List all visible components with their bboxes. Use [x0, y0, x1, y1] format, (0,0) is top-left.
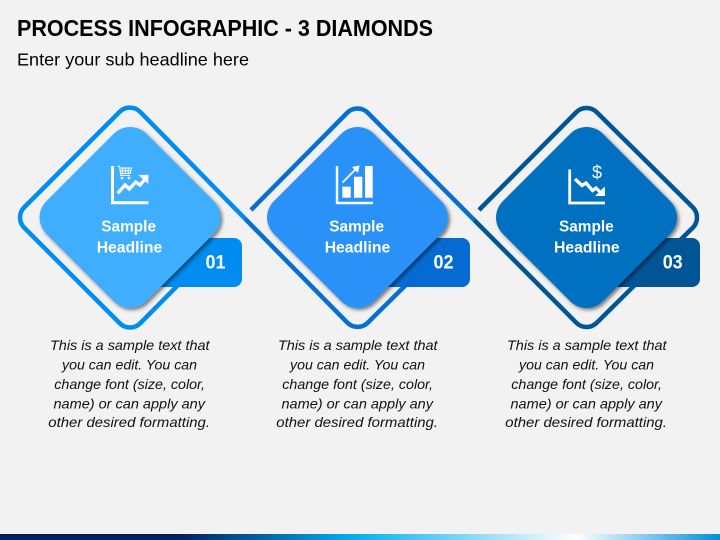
headline 3 [554, 218, 620, 256]
diamond panel 2 [267, 127, 448, 308]
body text 2: change font (size, color, [282, 376, 433, 392]
diamond panel 3 [496, 127, 677, 308]
body text 2: This is a sample text that [278, 337, 439, 353]
diamond panel 1 [40, 127, 220, 308]
body text 3: other desired formatting. [505, 414, 667, 430]
headline 1: Headline [97, 240, 162, 256]
step 3 diamond group [474, 108, 700, 327]
body text 3 [505, 337, 668, 430]
headline 1: Sample [101, 218, 156, 236]
body text 3: change font (size, color, [511, 376, 662, 392]
icon: falling chart with dollar [570, 162, 605, 203]
headline 2 [325, 218, 390, 256]
body text 2 [276, 337, 439, 430]
number 01: 01 [206, 252, 226, 274]
number tab 03 [608, 238, 700, 287]
body text 1 [48, 337, 211, 430]
headline 3: Sample [559, 218, 614, 236]
body text 1: name) or can apply any [54, 396, 206, 412]
headline 3: Headline [554, 240, 620, 256]
body text 1: change font (size, color, [54, 376, 205, 392]
bottom gradient bar [0, 534, 720, 540]
body text 1: other desired formatting. [48, 414, 210, 430]
headline 2: Headline [325, 240, 390, 256]
subtitle: Enter your sub headline here [17, 50, 249, 70]
body text 2: other desired formatting. [276, 414, 438, 430]
body text 1: you can edit. You can [61, 356, 197, 372]
body text 3: This is a sample text that [507, 337, 668, 353]
number tab 01 [150, 238, 242, 287]
outline: diamond 1 [20, 108, 245, 327]
body text 3: you can edit. You can [518, 356, 654, 372]
headline 2: Sample [329, 218, 384, 236]
body text 2: name) or can apply any [282, 396, 434, 412]
outline: diamond 3 [479, 108, 697, 250]
step 2 diamond group [245, 109, 474, 327]
number 02: 02 [434, 252, 454, 274]
icon: chart with shopping cart [112, 166, 148, 203]
icon: bar chart with arrow [337, 166, 373, 203]
step 1 diamond group [20, 108, 245, 327]
body text 1: This is a sample text that [50, 337, 211, 353]
title: PROCESS INFOGRAPHIC - 3 DIAMONDS [17, 15, 433, 41]
body text 3: name) or can apply any [510, 396, 663, 412]
headline 1 [97, 218, 162, 256]
number 03: 03 [663, 252, 683, 274]
number tab 02 [378, 238, 470, 287]
icon: falling chart with dollar: $ [592, 162, 602, 182]
body text 2: you can edit. You can [289, 356, 425, 372]
outline: diamond 2 [251, 109, 474, 220]
